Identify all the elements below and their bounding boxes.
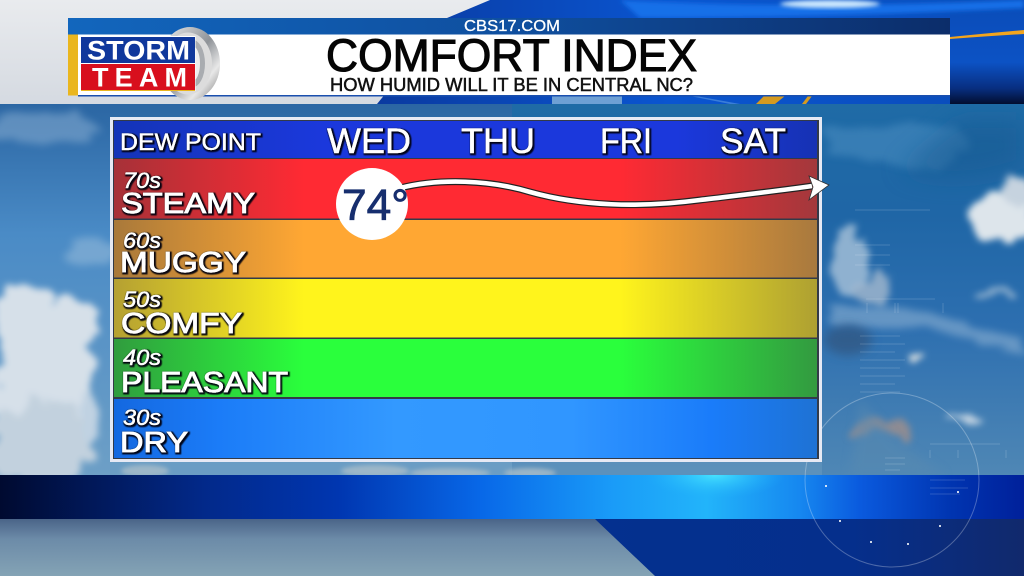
row: 60s muggy	[114, 220, 817, 279]
table header row	[114, 121, 817, 161]
row: 40s pleasant: PLEASANT	[121, 367, 288, 399]
logo: Storm Team	[80, 27, 220, 100]
row: 30s dry	[114, 399, 817, 459]
table header row: SAT	[720, 122, 786, 161]
subtitle: HOW HUMID WILL IT BE IN CENTRAL NC?	[330, 75, 693, 95]
row: 40s pleasant: 40s	[123, 345, 161, 370]
title: COMFORT INDEX	[326, 30, 697, 81]
callout: 74 degree dew point	[336, 168, 409, 240]
row: 30s dry: 30s	[123, 405, 161, 430]
table header row: DEW POINT	[120, 129, 261, 156]
table header row: THU	[461, 122, 535, 161]
row: 50s comfy: 50s	[123, 287, 161, 312]
row: 40s pleasant	[114, 339, 817, 399]
decorative HUD dots	[825, 485, 959, 545]
logo: Storm Team: TEAM	[92, 62, 187, 92]
lower-third blue band	[0, 475, 1024, 519]
row: 70s steamy	[114, 159, 817, 220]
row: 30s dry: DRY	[120, 427, 188, 459]
background: bottom panel	[0, 519, 1024, 576]
banner yellow accent	[68, 34, 78, 96]
site name: CBS17.COM	[464, 18, 560, 35]
table header row: FRI	[600, 122, 652, 161]
header banner	[68, 18, 950, 96]
row: 70s steamy: 70s	[123, 168, 161, 193]
background: sky photo panel	[0, 104, 1024, 490]
callout: 74 degree dew point: 74°	[342, 181, 409, 230]
row: 60s muggy: MUGGY	[120, 247, 246, 279]
decorative HUD circle and readouts	[805, 210, 1006, 567]
row: 70s steamy: STEAMY	[121, 188, 255, 220]
arrow: dew point trend	[400, 176, 829, 205]
panel: comfort index table	[110, 117, 822, 462]
background: top swoosh band	[0, 0, 1024, 104]
row: 60s muggy: 60s	[123, 228, 161, 253]
row: 50s comfy	[114, 279, 817, 340]
logo: Storm Team: STORM	[87, 36, 190, 66]
row: 50s comfy: COMFY	[121, 308, 242, 340]
table frame	[110, 117, 822, 462]
table header row: WED	[327, 122, 411, 161]
